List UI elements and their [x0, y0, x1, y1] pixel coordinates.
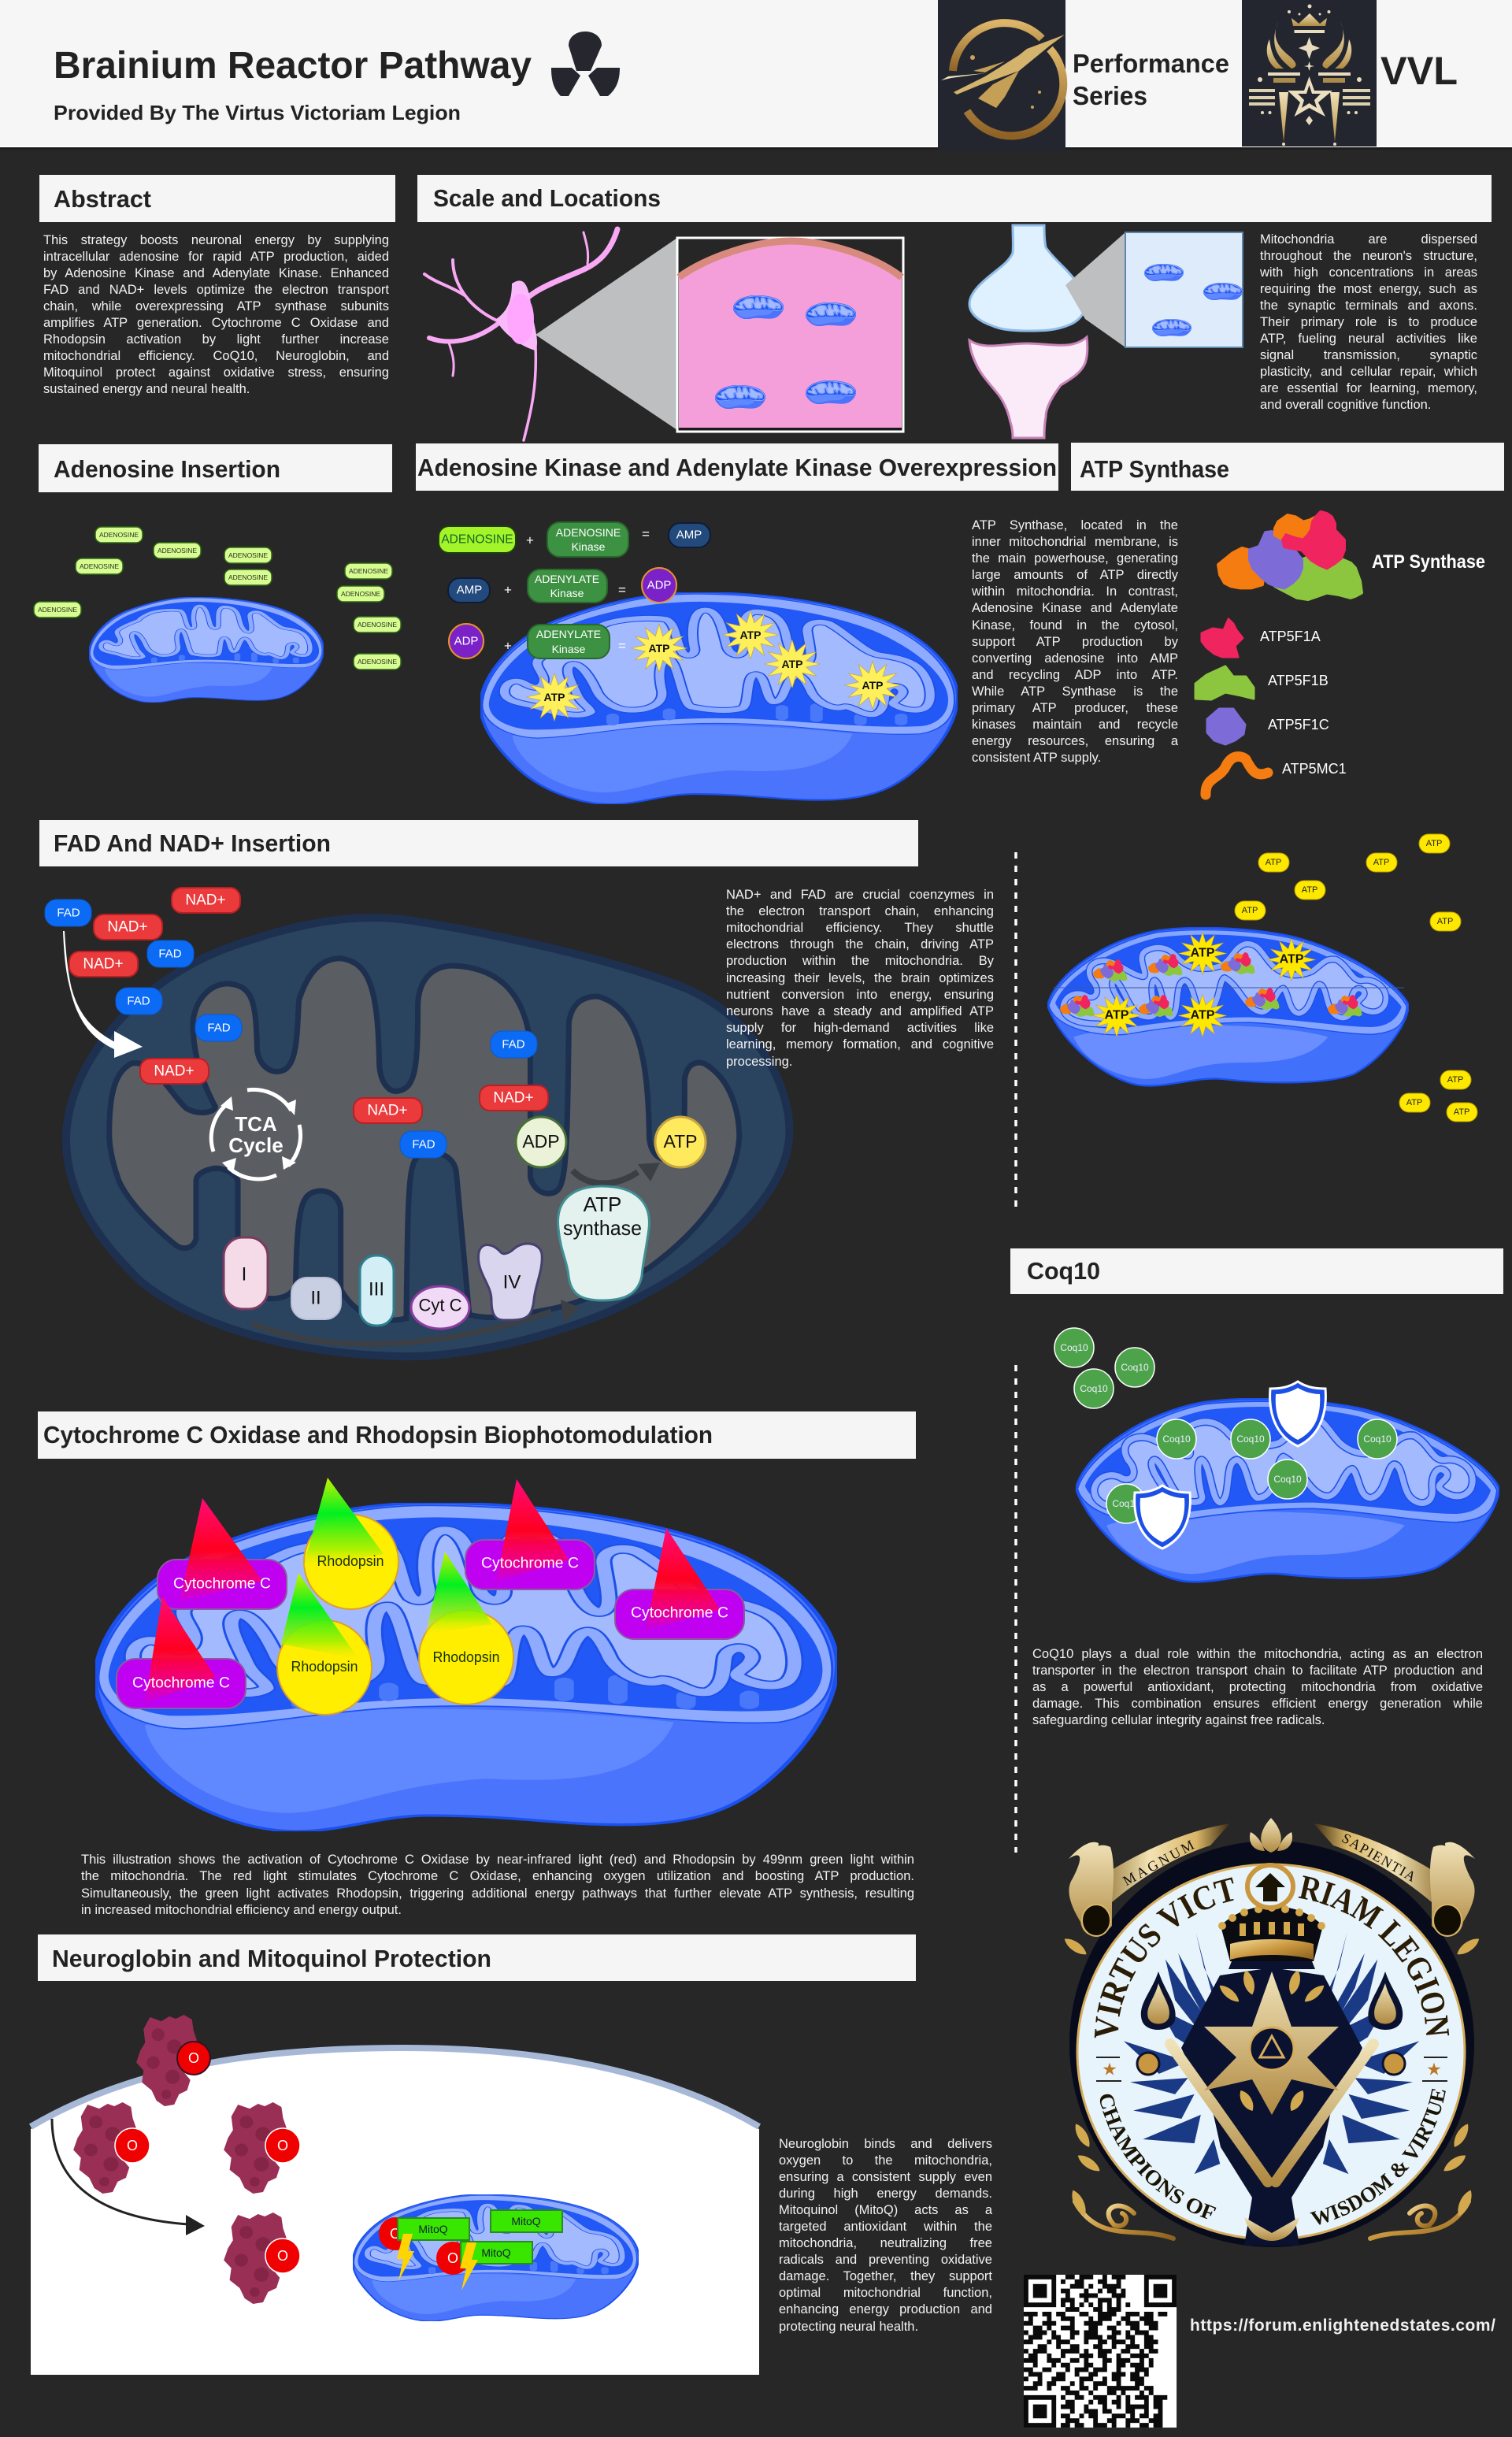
- Cytochrome C molecules: [117, 1540, 744, 1708]
- divider: upper dashed line: [1014, 852, 1017, 1208]
- ATP synthase: [558, 1186, 649, 1300]
- emblem arc title right: [1272, 1896, 1426, 2040]
- illustration: mitochondrion with CoQ10: Coq10: [1112, 1498, 1140, 1509]
- QR code: [1024, 2275, 1177, 2428]
- free ATP molecules: ATP: [1447, 1075, 1463, 1085]
- illustration: mitochondrion with ATP synthase: ATP: [1191, 947, 1215, 959]
- text: scale and locations: [1260, 232, 1477, 412]
- ATP: [655, 1117, 706, 1167]
- heading: Adenosine Kinase and Adenylate Kinase Overexpression: Adenosine Kinase and Adenylate Kinase Overexpression: [417, 454, 1057, 481]
- text: ATP synthase: primary ATP producer, these: [972, 701, 1178, 715]
- complex II: [291, 1278, 341, 1319]
- text: scale and locations: Their primary role is to produce: [1260, 315, 1477, 329]
- emblem arc title left: [1117, 1896, 1272, 2040]
- label: performance series: Series: [1073, 81, 1147, 110]
- FAD molecules: FAD: [158, 947, 182, 961]
- emblem flames: [1141, 1971, 1403, 2030]
- heading: Adenosine Insertion: Adenosine Insertion: [54, 455, 280, 483]
- equation: AMP to ADP: ADP: [647, 578, 671, 592]
- adenosine molecules: ADENOSINE: [158, 547, 197, 555]
- neuron: [424, 229, 617, 440]
- neuroglobin left: O: [127, 2138, 138, 2153]
- zoom panel terminal: [1125, 232, 1243, 347]
- FAD molecules: FAD: [57, 906, 80, 920]
- CoQ10 molecules: [1054, 1328, 1397, 1523]
- text: ATP synthase: Kinase, found in the cytosol,: [972, 618, 1178, 632]
- emblem star: [1204, 1971, 1339, 2115]
- illustration: biophotomodulation mitochondrion: Cytochrome C: [481, 1555, 579, 1572]
- complex I: [224, 1237, 268, 1309]
- text: scale and locations: and overall cognitive function.: [1260, 398, 1431, 412]
- illustration: biophotomodulation mitochondrion: Cytochrome C: [173, 1575, 271, 1593]
- legend: ATP5F1B: ATP5F1B: [1268, 673, 1329, 688]
- equation: AMP to ADP: +: [504, 583, 512, 597]
- NAD+ molecules: NAD+: [154, 1063, 195, 1079]
- illustration: neuron membrane panel: [31, 2015, 759, 2375]
- emblem side stars and coins: ★: [1102, 2059, 1117, 2079]
- free ATP molecules: ATP: [1266, 858, 1281, 867]
- illustration: mitochondrion with ATP: ATP: [649, 642, 669, 655]
- illustration: mitochondrion with ATP: ATP: [544, 691, 565, 703]
- text: ATP synthase: inner mitochondrial membrane, is: [972, 535, 1178, 549]
- equation: ADP to ATP: [449, 624, 626, 658]
- heading: ATP Synthase: [1071, 443, 1504, 491]
- complex I: I: [242, 1263, 246, 1285]
- mitochondrion: [353, 2194, 639, 2321]
- complex IV: IV: [503, 1271, 521, 1293]
- TCA cycle: [211, 1089, 301, 1179]
- free ATP molecules: ATP: [1454, 1107, 1469, 1117]
- logo: VVL emblem: [1242, 0, 1377, 147]
- inner membrane cristae: [109, 959, 739, 1320]
- illustration: mitochondrion with ATP: ATP: [782, 658, 802, 670]
- title: Brainium Reactor Pathway: [54, 45, 532, 87]
- emblem: Virtus Victoriam Legion crest: [1065, 1818, 1479, 2247]
- emblem flourishes: [1062, 1935, 1482, 2239]
- ATP bursts: [1093, 933, 1315, 1037]
- emblem motto right: [1314, 2079, 1447, 2226]
- postsynaptic terminal: [969, 337, 1088, 438]
- text: abstract: sustained energy and neural health.: [43, 382, 250, 396]
- text: ATP synthase: and recycling ADP into ATP.: [972, 668, 1178, 682]
- text: FAD and NAD+: supply for high-demand activities like: [726, 1021, 994, 1035]
- adenosine molecules: ADENOSINE: [99, 531, 139, 539]
- text: CoQ10: [1032, 1646, 1483, 1727]
- legend: ATP5F1C: [1207, 709, 1329, 744]
- emblem: Virtus Victoriam Legion crest: WISDOM & VIRTUE: [1310, 2089, 1446, 2224]
- illustration: mitochondrion with ATP: [480, 592, 958, 804]
- equation: adenosine to AMP: ADENOSINE: [441, 532, 513, 547]
- text: FAD and NAD+: the electron transport chain, enhancing: [726, 904, 994, 918]
- MitoQ molecules: MitoQ: [481, 2246, 511, 2259]
- neuroglobin right: O: [277, 2138, 288, 2153]
- heading: Neuroglobin and Mitoquinol Protection: [38, 1934, 916, 1981]
- illustration: mitochondrion with ATP synthase: ATP: [1105, 1008, 1129, 1022]
- legend: ATP5MC1: ATP5MC1: [1282, 761, 1347, 777]
- neuroglobin top: O: [188, 2050, 199, 2066]
- free ATP molecules: ATP: [1373, 858, 1389, 867]
- text: abstract: mitochondrial efficiency. CoQ10, Neuroglobin, and: [43, 349, 389, 363]
- banner text: [1120, 1830, 1418, 1889]
- heading: Coq10: [1010, 1248, 1503, 1294]
- illustration: mitochondrion with CoQ10: Coq10: [1273, 1474, 1302, 1485]
- banner text: MAGNUM: [1120, 1837, 1197, 1889]
- cytochrome C: [411, 1286, 469, 1329]
- illustration: biophotomodulation mitochondrion: Rhodopsin: [317, 1553, 384, 1569]
- equation: AMP to ADP: ADENYLATE: [535, 573, 599, 585]
- text: ATP synthase: Adenosine Kinase and Adenylate: [972, 601, 1178, 615]
- header band: [0, 0, 1512, 150]
- equation: AMP to ADP: [448, 568, 676, 603]
- emblem bottom finial: [1244, 2217, 1299, 2241]
- NAD+ molecules: NAD+: [185, 892, 226, 909]
- neuroglobin top: [136, 2015, 210, 2106]
- text: ATP synthase: support ATP production by: [972, 635, 1178, 649]
- illustration: biophotomodulation mitochondrion: Cytochrome C: [132, 1675, 230, 1692]
- legend: ATP5F1B: [1195, 666, 1329, 699]
- illustration: synapse with zoom panel: [969, 225, 1243, 438]
- illustration: mitochondrion with ATP synthase: ATP: [1280, 953, 1304, 966]
- text: ATP synthase: large amounts of ATP directly: [972, 568, 1178, 582]
- free ATP molecules: ATP: [1437, 917, 1453, 926]
- label: VVL: VVL: [1380, 49, 1458, 93]
- text: neuroglobin and mitoquinol: oxygen to the mitochondria,: [779, 2153, 992, 2168]
- zoom cone: [536, 238, 677, 430]
- text: abstract: This strategy boosts neuronal energy by supplying: [43, 233, 389, 247]
- emblem torches: [1170, 2044, 1373, 2182]
- text: FAD and NAD+: processing.: [726, 1055, 792, 1069]
- text: neuroglobin and mitoquinol: [779, 2136, 992, 2334]
- adenosine molecules: ADENOSINE: [80, 562, 119, 570]
- adenosine molecules: ADENOSINE: [38, 606, 77, 614]
- Rhodopsin molecules: [277, 1515, 513, 1715]
- white entry arrow: [64, 931, 143, 1058]
- ATP synthase: ATP: [584, 1193, 621, 1216]
- neuroglobin bottom: O: [277, 2248, 288, 2264]
- NAD+ molecules: [69, 888, 548, 1123]
- label: performance series: Performance: [1073, 49, 1229, 78]
- cytochrome C: Cyt C: [419, 1295, 462, 1315]
- heading: Scale and Locations: [417, 175, 1492, 222]
- FAD molecules: FAD: [502, 1038, 525, 1051]
- free ATP molecules: ATP: [1302, 885, 1317, 895]
- icon: radiation symbol: [551, 32, 620, 96]
- text: scale and locations: with high concentrations in areas: [1260, 265, 1477, 280]
- illustration: mitochondrion with ATP synthase: ATP: [1191, 1008, 1215, 1022]
- presynaptic terminal: [969, 225, 1085, 331]
- text: neuroglobin and mitoquinol: ensuring a consistent supply even: [779, 2170, 992, 2184]
- free ATP molecules: ATP: [1426, 839, 1442, 848]
- text: FAD and NAD+: nutrient conversion into energy, ensuring: [726, 988, 994, 1002]
- text: abstract: Rhodopsin activation by light further increase: [43, 332, 389, 347]
- heading: Adenosine Insertion: [39, 444, 392, 492]
- heading: Cytochrome C Oxidase and Rhodopsin Biophotomodulation: Cytochrome C Oxidase and Rhodopsin Biophotomodulation: [43, 1421, 713, 1448]
- heading: Coq10: Coq10: [1027, 1257, 1100, 1285]
- heading: Adenosine Kinase and Adenylate Kinase Overexpression: [416, 443, 1058, 491]
- emblem inner field: [1077, 1864, 1465, 2239]
- heading: Abstract: Abstract: [54, 185, 151, 213]
- MitoQ molecules: MitoQ: [511, 2215, 541, 2227]
- text: ATP synthase: ATP Synthase, located in the: [972, 518, 1178, 532]
- equation: adenosine to AMP: Kinase: [572, 540, 606, 553]
- equation: AMP to ADP: Kinase: [550, 587, 584, 599]
- FAD molecules: [45, 900, 537, 1158]
- free ATP molecules: [1235, 834, 1477, 1122]
- equation: adenosine to AMP: ADENOSINE: [556, 526, 621, 539]
- emblem: Virtus Victoriam Legion crest: CHAMPIONS OF: [1099, 2094, 1216, 2220]
- emblem central shield: [1181, 1968, 1362, 2246]
- text: neuroglobin and mitoquinol: damage. Together, they support: [779, 2269, 992, 2283]
- MitoQ molecules: MitoQ: [418, 2223, 448, 2235]
- text: scale and locations: the synaptic terminals and axons.: [1260, 299, 1477, 313]
- free radical bolts: [397, 2234, 478, 2290]
- text: ATP synthase: converting adenosine into AMP: [972, 651, 1178, 666]
- text: neuroglobin and mitoquinol: protecting neural health.: [779, 2320, 918, 2334]
- ADP: ADP: [522, 1131, 560, 1152]
- illustration: mitochondrion with CoQ10: Coq10: [1236, 1434, 1265, 1445]
- subtitle: Provided By The Virtus Victoriam Legion: [54, 101, 461, 124]
- emblem blue leaves: [1124, 1933, 1419, 2174]
- legend: ATP5F1A: ATP5F1A: [1260, 629, 1321, 644]
- text: cytochrome and rhodopsin: This illustration shows the activation of Cytochrome C Oxidase by near-infrared light (red) and Rhodopsin by 499nm green light within: [81, 1853, 914, 1867]
- emblem side stars and coins: ★: [1426, 2059, 1442, 2079]
- text: ATP synthase: within mitochondria. In contrast,: [972, 584, 1178, 599]
- text: neuroglobin and mitoquinol: Neuroglobin binds and delivers: [779, 2136, 992, 2150]
- label: ATP Synthase: ATP Synthase: [1372, 551, 1485, 573]
- text: scale and locations: Mitochondria are dispersed: [1260, 232, 1477, 246]
- text: abstract: amplifies ATP generation. Cytochrome C Oxidase and: [43, 316, 389, 330]
- text: FAD and NAD+: [726, 887, 994, 1069]
- legend: ATP5F1C: ATP5F1C: [1268, 717, 1329, 733]
- complex III: III: [369, 1279, 384, 1300]
- text: ATP synthase: energy resources, ensuring a: [972, 734, 1178, 748]
- text: abstract: [43, 233, 389, 396]
- illustration: mitochondrion with ATP: ATP: [862, 679, 883, 692]
- text: neuroglobin and mitoquinol: radicals and preventing oxidative: [779, 2253, 992, 2267]
- emblem side stars and coins: [1096, 2053, 1447, 2081]
- neuroglobin bottom: [224, 2213, 300, 2304]
- equation: adenosine to AMP: [439, 522, 710, 557]
- heading: Scale and Locations: Scale and Locations: [433, 184, 661, 212]
- text: abstract: Mitoquinol protect against oxidative stress, ensuring: [43, 365, 389, 380]
- red near-infrared light beams: [145, 1479, 720, 1703]
- neuroglobin right: [224, 2102, 300, 2194]
- adenosine molecules: ADENOSINE: [341, 590, 380, 598]
- equation: AMP to ADP: =: [618, 583, 626, 597]
- illustration: mitochondrion with CoQ10: Coq10: [1162, 1434, 1191, 1445]
- equation: adenosine to AMP: =: [642, 526, 650, 542]
- adenosine molecules: ADENOSINE: [358, 658, 397, 666]
- equation: AMP to ADP: AMP: [457, 583, 482, 597]
- emblem motto left: [1099, 2095, 1228, 2226]
- oxygen delivery arrow: [52, 2119, 205, 2235]
- illustration: electron transport chain mitochondrion: [45, 888, 789, 1356]
- illustration: biophotomodulation mitochondrion: Rhodopsin: [433, 1649, 499, 1665]
- text: FAD and NAD+: mitochondrial efficiency. They shuttle: [726, 921, 994, 935]
- text: ATP synthase: While ATP Synthase is the: [972, 684, 1178, 699]
- FAD molecules: FAD: [127, 994, 150, 1008]
- text: neuroglobin and mitoquinol: targeted antioxidant within the: [779, 2220, 992, 2234]
- text: CoQ10: CoQ10 plays a dual role within the mitochondria, acting as an electron: [1032, 1646, 1483, 1660]
- label: performance series: [1073, 49, 1229, 110]
- text: ATP synthase: the main powerhouse, generating: [972, 551, 1178, 566]
- text: ATP synthase: [972, 518, 1178, 765]
- adenosine molecules: ADENOSINE: [228, 573, 268, 581]
- heading: Abstract: [39, 175, 395, 222]
- text: neuroglobin and mitoquinol: enhancing energy production and: [779, 2302, 992, 2316]
- NAD+ molecules: NAD+: [493, 1090, 534, 1106]
- illustration: mitochondrion with CoQ10: Coq10: [1121, 1362, 1149, 1373]
- emblem: Virtus Victoriam Legion crest: RIAM LEGION: [1298, 1875, 1449, 2035]
- FAD molecules: FAD: [412, 1137, 435, 1152]
- text: scale and locations: requiring the most energy, such as: [1260, 282, 1477, 296]
- mitochondria in soma: [715, 295, 856, 409]
- legend: ATP5MC1: [1206, 756, 1347, 795]
- zoom cone: [1065, 232, 1125, 347]
- text: FAD and NAD+: neurons have a steady and amplified ATP: [726, 1004, 994, 1018]
- MitoQ molecules: [398, 2210, 562, 2264]
- oxygen in mitochondrion: O: [390, 2226, 401, 2242]
- TCA cycle: TCA: [235, 1112, 277, 1136]
- text: neuroglobin and mitoquinol: during high energy demands.: [779, 2187, 992, 2201]
- logo: performance series rocket: [938, 0, 1065, 151]
- text: scale and locations: signal transmission, synaptic: [1260, 348, 1477, 362]
- oxygen in mitochondrion: O: [447, 2250, 458, 2266]
- equation: adenosine to AMP: AMP: [676, 528, 702, 542]
- text: FAD and NAD+: production within the mitochondria. By: [726, 954, 994, 968]
- NAD+ molecules: NAD+: [107, 918, 148, 936]
- neuroglobin left: [73, 2102, 150, 2194]
- equation: ADP to ATP: =: [618, 638, 626, 654]
- text: FAD and NAD+: learning, memory formation, and cognitive: [726, 1037, 994, 1052]
- adenosine molecules: [34, 527, 401, 670]
- ATP synthase: synthase: [563, 1216, 642, 1240]
- text: CoQ10: as a powerful antioxidant, protecting mitochondria from oxidative: [1032, 1679, 1483, 1693]
- NAD+ molecules: NAD+: [367, 1103, 408, 1118]
- illustration: mitochondrion adenosine insertion: [89, 597, 324, 703]
- outer membrane: [66, 918, 789, 1356]
- heading: FAD And NAD+ Insertion: [39, 820, 918, 866]
- divider: lower dashed line: [1014, 1365, 1017, 1853]
- text: CoQ10: safeguarding cellular integrity against free radicals.: [1032, 1712, 1325, 1727]
- adenosine molecules: ADENOSINE: [349, 567, 388, 575]
- emblem gold leaves: [1217, 1969, 1327, 2113]
- text: FAD and NAD+: electrons through the chain, driving ATP: [726, 937, 994, 951]
- URL: https://forum.enlightenedstates.com/: [1190, 2316, 1495, 2335]
- text: neuroglobin and mitoquinol: optimal mitochondrial function,: [779, 2286, 992, 2300]
- illustration: mitochondrion with ATP: ATP: [740, 629, 761, 641]
- complex III: [360, 1256, 394, 1326]
- ADP: [516, 1117, 566, 1167]
- text: cytochrome and rhodopsin: [81, 1853, 914, 1917]
- text: abstract: FAD and NAD+ levels optimize the electron transport: [43, 283, 389, 297]
- text: scale and locations: ATP, fueling neural activities like: [1260, 332, 1477, 346]
- equation: ADP to ATP: ADP: [454, 635, 478, 647]
- ATP synthase complexes: [1060, 953, 1362, 1016]
- NAD+ molecules: NAD+: [83, 956, 124, 972]
- illustration: biophotomodulation mitochondrion: [95, 1478, 837, 1831]
- emblem crown: [1218, 1904, 1325, 1969]
- heading: Cytochrome C Oxidase and Rhodopsin Biophotomodulation: [38, 1411, 916, 1459]
- shield lower: [1135, 1486, 1190, 1549]
- text: cytochrome and rhodopsin: in increased mitochondrial efficiency and energy output.: [81, 1903, 402, 1917]
- illustration: mitochondrion with CoQ10: Coq10: [1363, 1434, 1392, 1445]
- illustration: mitochondrion with ATP synthase: [1047, 928, 1409, 1085]
- illustration: mitochondrion with CoQ10: Coq10: [1060, 1342, 1088, 1353]
- zoom panel cell: [677, 238, 903, 432]
- ATP production arrow: [573, 1170, 638, 1183]
- text: abstract: intracellular adenosine for rapid ATP production, aided: [43, 250, 389, 264]
- free ATP molecules: ATP: [1242, 906, 1258, 915]
- text: FAD and NAD+: NAD+ and FAD are crucial coenzymes in: [726, 887, 994, 901]
- text: ATP synthase: kinases maintain and recycle: [972, 718, 1178, 732]
- equation: ADP to ATP: Kinase: [552, 643, 586, 655]
- text: neuroglobin and mitoquinol: Mitoquinol (MitoQ) acts as a: [779, 2203, 992, 2217]
- text: scale and locations: plasticity, and cellular repair, which: [1260, 365, 1477, 379]
- green light beams: [281, 1478, 492, 1660]
- text: CoQ10: damage. This combination ensures efficient energy generation while: [1032, 1697, 1483, 1711]
- mitochondria in terminal: [1144, 264, 1243, 336]
- oxygen in mitochondrion: [379, 2217, 469, 2275]
- FAD molecules: FAD: [207, 1021, 231, 1035]
- banner text: SAPIENTIA: [1340, 1830, 1418, 1885]
- ATP: ATP: [663, 1131, 698, 1152]
- text: abstract: by Adenosine Kinase and Adenylate Kinase. Enhanced: [43, 266, 389, 280]
- TCA cycle: Cycle: [228, 1133, 284, 1157]
- text: scale and locations: throughout the neuron's structure,: [1260, 249, 1477, 263]
- emblem backing: [1069, 1841, 1474, 2247]
- adenosine molecules: ADENOSINE: [358, 621, 397, 629]
- legend: ATP5F1A: [1202, 619, 1321, 657]
- illustration: mitochondrion with CoQ10: Coq10: [1080, 1383, 1108, 1394]
- illustration: mitochondrion with CoQ10: [1054, 1328, 1499, 1582]
- heading: ATP Synthase: ATP Synthase: [1080, 455, 1229, 483]
- emblem: Virtus Victoriam Legion crest: VIRTUS VICT: [1095, 1877, 1234, 2038]
- complex II: II: [310, 1287, 321, 1309]
- emblem left banner: [1095, 1823, 1230, 1902]
- emblem right banner: [1314, 1823, 1448, 1902]
- text: CoQ10: transporter in the electron transport chain to facilitate ATP production and: [1032, 1664, 1483, 1678]
- emblem ribbon scrolls: [1069, 1842, 1475, 1936]
- text: scale and locations: are essential for learning, memory,: [1260, 381, 1477, 395]
- equation: ADP to ATP: +: [504, 638, 512, 654]
- shield upper: [1270, 1382, 1325, 1446]
- text: FAD and NAD+: increasing their levels, the brain optimizes: [726, 971, 994, 985]
- text: ATP synthase: consistent ATP supply.: [972, 751, 1101, 765]
- text: cytochrome and rhodopsin: the mitochondria. The red light stimulates Cytochrome C Oxidase, enhancing oxygen utilization and boosting ATP production.: [81, 1869, 914, 1883]
- heading: Neuroglobin and Mitoquinol Protection: Neuroglobin and Mitoquinol Protection: [52, 1945, 491, 1972]
- free ATP molecules: ATP: [1406, 1098, 1422, 1107]
- text: neuroglobin and mitoquinol: mitochondria, neutralizing free: [779, 2236, 992, 2250]
- text: cytochrome and rhodopsin: Simultaneously, the green light activates Rhodopsin, triggering additional energy pathways that further elevate ATP synthesis, resulting: [81, 1886, 914, 1901]
- emblem top medallion: [1247, 1865, 1293, 1908]
- emblem top finial: [1250, 1818, 1292, 1853]
- illustration: biophotomodulation mitochondrion: Cytochrome C: [631, 1605, 728, 1621]
- illustration: neuron with zoom panel: [424, 229, 903, 440]
- complex IV: [478, 1244, 542, 1320]
- equation: ADP to ATP: ADENYLATE: [536, 628, 601, 640]
- illustration: biophotomodulation mitochondrion: Rhodopsin: [291, 1659, 358, 1675]
- equation: adenosine to AMP: +: [526, 532, 534, 548]
- heading: FAD And NAD+ Insertion: FAD And NAD+ Insertion: [54, 829, 331, 857]
- illustration: ATP synthase complex: [1218, 512, 1362, 599]
- text: abstract: chain, while overexpressing ATP synthase subunits: [43, 299, 389, 313]
- proton flow arrow: [252, 1311, 551, 1344]
- adenosine molecules: ADENOSINE: [228, 551, 268, 559]
